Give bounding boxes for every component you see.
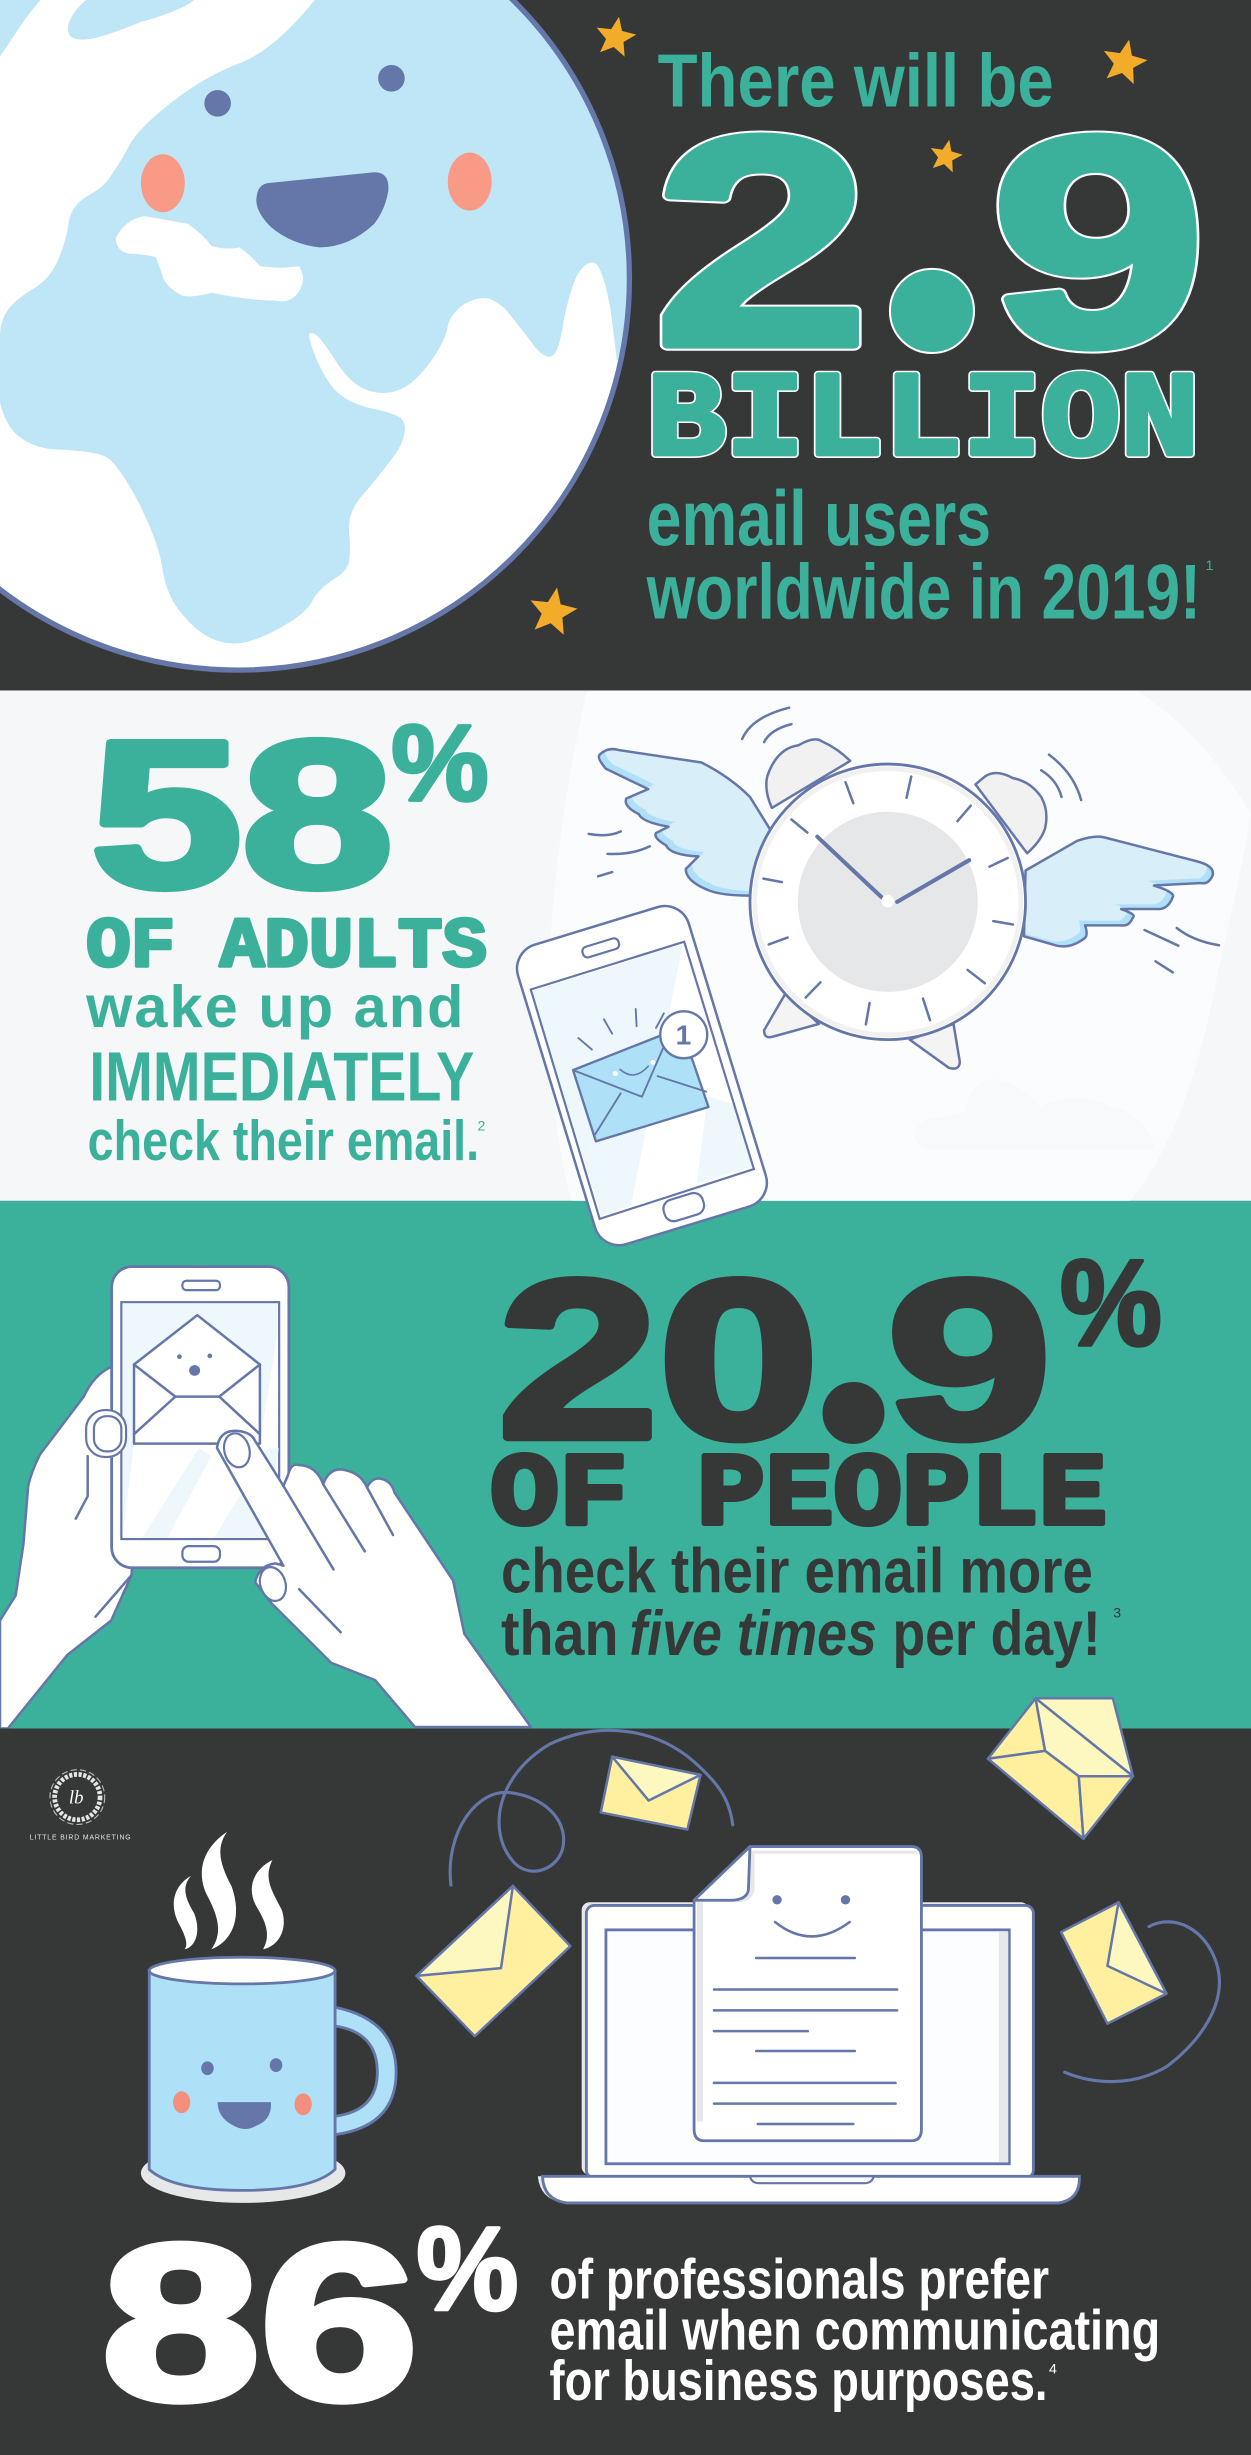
- heading: IMMEDIATELY: IMMEDIATELY: [89, 1038, 474, 1116]
- text: check their email: check their email.: [88, 1109, 479, 1172]
- panel: 86 percent of professionals: [0, 1698, 1251, 2455]
- illustration: phone with notification (overlaps panels): [511, 900, 773, 1251]
- text: check their email more than five times per day: [501, 1536, 1121, 1669]
- text: wake up and: wake up and: [85, 973, 463, 1040]
- background: cloud: [914, 1079, 1155, 1149]
- big number: 2.9: [654, 0, 1206, 440]
- icon: notification badge: [660, 1011, 707, 1058]
- big number: 2.9: 9: [991, 76, 1206, 408]
- percent sign: %: [391, 702, 489, 823]
- text: check their email more than five times per day: than: [501, 1599, 618, 1669]
- text: check their email more than five times per day: 3: [1113, 1604, 1121, 1620]
- text: of professionals prefer email when communicating for business purposes: of professionals prefer: [550, 2247, 1049, 2310]
- heading: There will be: There will be: [658, 38, 1054, 122]
- heading: BILLION: BILLION: [647, 355, 1199, 491]
- text: email users worldwide in 2019: [646, 474, 1214, 635]
- big number: 86: 86: [102, 2199, 418, 2446]
- illustration: smiling globe: [0, 0, 673, 670]
- motion lines: [589, 708, 1219, 972]
- panel: 58 percent of adults: [0, 690, 1251, 1201]
- text: email users worldwide in 2019: email users: [647, 474, 991, 562]
- icon: phone held: [112, 1267, 289, 1568]
- big number: 20.9: 20: [498, 1233, 819, 1485]
- icon: envelope top small: [601, 1757, 700, 1830]
- icon: left hand: [0, 1367, 141, 1729]
- text: check their email more than five times per day: five times: [629, 1599, 877, 1669]
- logo: Little Bird Marketing: lb: [69, 1788, 84, 1809]
- icon: smiling document: [694, 1847, 921, 2141]
- icon: clock bells: [766, 739, 1046, 853]
- text: check their email more than five times per day: check their email more: [501, 1536, 1093, 1606]
- icon: swirl lines: [450, 1730, 1219, 2082]
- icon: envelope top right: [988, 1698, 1133, 1839]
- percent sign: %: [1060, 1234, 1162, 1371]
- icon: clock face: [750, 764, 1026, 1040]
- icon: notification badge: 1: [676, 1018, 691, 1050]
- text: of professionals prefer email when communicating for business purposes: [550, 2247, 1160, 2412]
- logo: Little Bird Marketing: [30, 1770, 131, 1842]
- icon: envelope right: [1061, 1902, 1166, 2024]
- illustration: hands holding phone: [0, 1267, 531, 1729]
- heading: BILLION: BILLION: [647, 355, 1199, 491]
- icon: email envelope: [573, 1033, 708, 1141]
- text: of professionals prefer email when communicating for business purposes: 4: [1049, 2361, 1057, 2377]
- text: check their email more than five times per day: per day!: [892, 1599, 1101, 1669]
- big number: 20.9: [498, 1134, 1051, 1510]
- big number: 2.9: 2: [654, 76, 869, 408]
- icon: steam: [174, 1832, 284, 1949]
- icon: coffee mug: [141, 1957, 396, 2203]
- icon: left wing: [599, 744, 777, 896]
- illustration: laptop with document: [538, 1847, 1079, 2203]
- illustration: winged alarm clock: [589, 708, 1219, 1069]
- text: of professionals prefer email when communicating for business purposes: for business purposes.: [550, 2349, 1047, 2412]
- icon: right hand: [217, 1430, 531, 1727]
- icon: left thumb: [76, 1410, 132, 1617]
- icon: mug face: [173, 2058, 312, 2129]
- icon: envelope left big: [416, 1886, 570, 2036]
- icon: stars: [526, 13, 1151, 636]
- text: check their email: 2: [478, 1117, 486, 1133]
- heading: OF PEOPLE: [490, 1438, 1107, 1555]
- heading: OF PEOPLE: PEOPLE: [697, 1438, 1107, 1555]
- icon: globe face: [141, 65, 492, 247]
- big number: 20.9: .: [811, 1134, 896, 1510]
- logo: Little Bird Marketing: LITTLE BIRD MARKETING: [30, 1835, 131, 1842]
- panel: 2.9 billion email users: [0, 0, 1251, 690]
- big number: 2.9: 2: [654, 76, 869, 408]
- big number: 58: 58: [91, 698, 393, 931]
- icon: clock feet: [764, 993, 960, 1069]
- big number: 20.9: 9: [887, 1233, 1051, 1485]
- icon: right wing: [1018, 832, 1213, 946]
- big number: 2.9: 9: [991, 76, 1206, 408]
- heading: OF ADULTS: OF ADULTS: [86, 908, 487, 988]
- heading: OF PEOPLE: OF: [490, 1438, 628, 1555]
- percent sign: %: [416, 2202, 518, 2335]
- icon: surprised envelope: [134, 1315, 260, 1444]
- panel: 20.9 percent of people: [0, 1134, 1251, 1729]
- text: email users worldwide in 2019: 1: [1206, 557, 1214, 573]
